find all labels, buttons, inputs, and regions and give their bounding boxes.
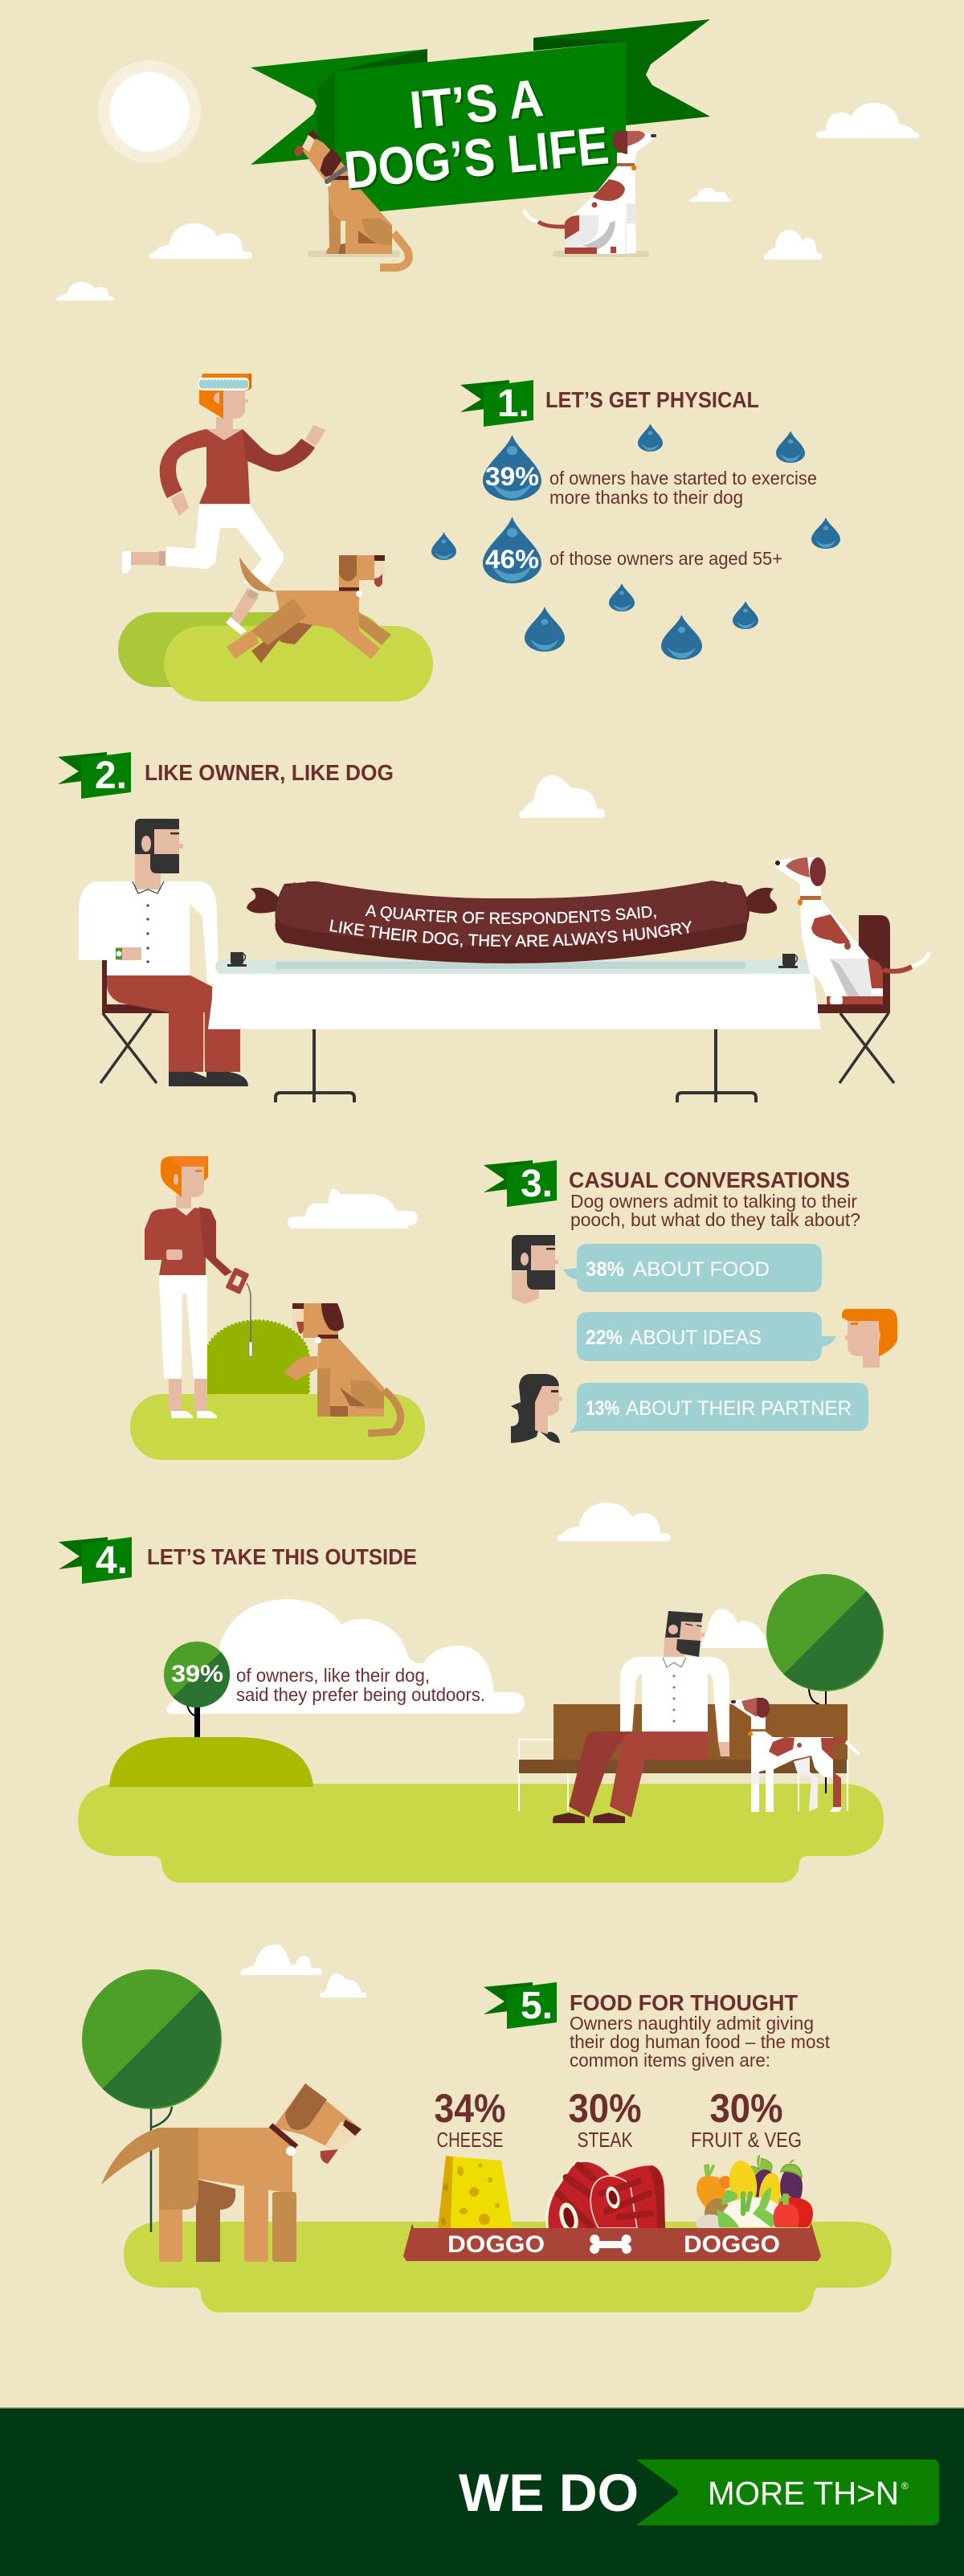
intro text 3: pooch, but what do they talk about?: [570, 1209, 860, 1230]
speech bubble: food: ABOUT FOOD: [633, 1258, 770, 1281]
stat 46%: of those owners are aged 55+: [549, 548, 782, 569]
stat: steak: STEAK: [577, 2128, 633, 2152]
orange haired head: [842, 1309, 897, 1368]
big tree: [766, 1574, 884, 1704]
heading 1: LET’S GET PHYSICAL: [545, 387, 759, 412]
title text: DOG’S LIFE: [341, 115, 611, 200]
cloud: [320, 1973, 366, 1997]
stat 39%: more thanks to their dog: [549, 487, 743, 508]
bush: [206, 1321, 308, 1394]
small tree with stat: [164, 1642, 230, 1737]
stat: cheese: CHEESE: [437, 2128, 503, 2152]
tree: [82, 1969, 222, 2232]
running dog: [227, 555, 391, 663]
section 3: walking scene: [130, 1156, 425, 1460]
cloud: [764, 230, 822, 260]
title text: DOG’S LIFE: [344, 117, 614, 202]
section 4: outdoor scene: [78, 1574, 884, 1883]
speech bubble: ideas: 22%: [586, 1327, 623, 1349]
badge 2: [58, 752, 131, 799]
food stats: [434, 2086, 802, 2152]
badge 4: 4.: [96, 1539, 128, 1582]
badge 4: [59, 1537, 132, 1584]
speech bubble: food: 38%: [586, 1258, 624, 1281]
stat: cheese: [434, 2086, 506, 2152]
title text: [341, 67, 614, 202]
intro text 5: their dog human food – the most: [570, 2031, 831, 2052]
hill: [109, 1737, 313, 1787]
title ribbon: [251, 19, 710, 222]
dog: [101, 2083, 362, 2262]
standing dog: [731, 1698, 858, 1812]
food bowl: [403, 2223, 821, 2261]
badge 1: 1.: [497, 382, 529, 425]
cloud: [689, 188, 731, 202]
outdoors text: said they prefer being outdoors.: [236, 1684, 485, 1705]
title text: IT’S A: [410, 69, 548, 141]
intro text 5: common items given are:: [570, 2050, 770, 2071]
outdoors text: of owners, like their dog,: [236, 1665, 430, 1686]
speech bubble: ideas: ABOUT IDEAS: [630, 1327, 762, 1349]
chair and dog: [775, 857, 929, 1083]
stat 46%: [483, 517, 782, 583]
registered mark: ®: [901, 2480, 909, 2492]
intro text 5: [570, 2013, 831, 2071]
big cloud: [166, 1599, 525, 1714]
footer: [0, 2407, 964, 2576]
heading 5: FOOD FOR THOUGHT: [570, 1990, 798, 2015]
icon: bone: [590, 2235, 631, 2254]
ground: [124, 2222, 892, 2312]
stat: steak: [569, 2086, 641, 2152]
badge 2: 2.: [95, 754, 127, 797]
outdoors text: [236, 1665, 485, 1705]
small tree with stat: 39%: [171, 1661, 223, 1687]
cloud: [240, 1944, 322, 1975]
food bowl: DOGGO: [447, 2231, 545, 2258]
coffee cups: [227, 952, 798, 968]
stat: fruit and veg: [691, 2086, 802, 2152]
sun: [98, 60, 201, 163]
sausage banner: [247, 881, 778, 963]
woman: [145, 1156, 252, 1418]
section 5: food scene: [82, 1969, 892, 2312]
badge 3: 3.: [521, 1163, 553, 1205]
brown dog sitting: [293, 130, 409, 268]
sitting dog: [284, 1303, 401, 1433]
food bowl: DOGGO: [684, 2231, 780, 2258]
heading 2: LIKE OWNER, LIKE DOG: [145, 760, 394, 785]
seated man outdoors: [553, 1611, 729, 1823]
cloud: [816, 103, 919, 138]
section 1: runner illustration: [118, 374, 433, 701]
cheese: [438, 2156, 513, 2228]
cloud: [149, 223, 252, 259]
dark haired head: [511, 1374, 562, 1443]
ground: [130, 1394, 425, 1460]
cloud: [56, 282, 114, 301]
banner text line two: LIKE THEIR DOG, THEY ARE ALWAYS HUNGRY: [329, 919, 692, 948]
small rain drops: [431, 423, 840, 660]
badge 5: [484, 1982, 557, 2029]
badge 1: [460, 380, 533, 427]
logo text: MORE TH>N: [708, 2475, 899, 2512]
heading 4: LET’S TAKE THIS OUTSIDE: [147, 1544, 417, 1569]
stat 39%: of owners have started to exercise: [549, 468, 817, 489]
intro text 3: Dog owners admit to talking to their: [570, 1191, 857, 1212]
stat: fruit and veg: FRUIT & VEG: [691, 2128, 802, 2152]
intro text 3: [570, 1191, 860, 1230]
cloud: [288, 1188, 418, 1229]
steak: [545, 2160, 665, 2235]
white dog sitting: [525, 131, 656, 257]
front ground: [164, 626, 433, 701]
speech bubble: partner: [570, 1383, 868, 1433]
speech bubble: food: [563, 1244, 822, 1292]
badge 3: [484, 1160, 557, 1207]
speech bubble: partner: 13%: [586, 1397, 619, 1420]
speech bubble: ideas: [577, 1312, 836, 1361]
stat: fruit and veg: 30%: [710, 2086, 782, 2131]
bearded man head: [512, 1235, 558, 1304]
stat: steak: 30%: [569, 2086, 641, 2131]
ground: [78, 1784, 884, 1883]
stat: cheese: 34%: [434, 2086, 506, 2131]
cloud: [519, 775, 605, 818]
logo tag: [636, 2459, 939, 2525]
fruit and vegetables: [696, 2155, 813, 2232]
logo tagline: WE DO: [459, 2463, 639, 2522]
section 2: table scene: [79, 819, 932, 1102]
heading 3: CASUAL CONVERSATIONS: [569, 1167, 850, 1192]
speech bubble: partner: ABOUT THEIR PARTNER: [626, 1397, 852, 1420]
stat 39%: [483, 435, 817, 508]
runner: [122, 374, 325, 635]
cloud: [558, 1503, 671, 1541]
seated man: [79, 819, 248, 1086]
bench: [519, 1704, 848, 1811]
table: [208, 959, 821, 1102]
stat 46%: 46%: [485, 545, 539, 574]
banner text: A QUARTER OF RESPONDENTS SAID,: [365, 905, 656, 924]
intro text 5: Owners naughtily admit giving: [570, 2013, 814, 2034]
cloud behind bench: [701, 1609, 769, 1648]
stat drops and text: [431, 423, 840, 660]
badge 5: 5.: [521, 1985, 553, 2027]
back ground: [118, 612, 387, 687]
title text: IT’S A: [407, 67, 545, 140]
stat 39%: 39%: [485, 462, 539, 491]
